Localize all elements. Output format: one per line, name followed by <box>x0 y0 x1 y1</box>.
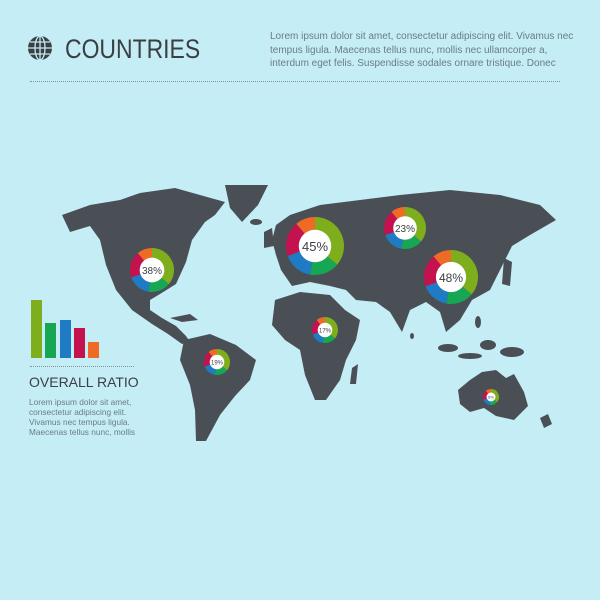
Iceland <box>250 219 262 225</box>
Philippines <box>475 316 481 328</box>
bar chart <box>31 300 99 358</box>
donut 48%: 48% <box>439 271 463 285</box>
donut 38%: 38% <box>142 266 162 277</box>
header text: Lorem ipsum dolor sit amet, consectetur adipiscing elit. Vivamus nec tempus ligula. Maecenas tellus nunc, mollis nec ullamcorper a, interdum eget felis. Suspendisse sodales ornare tristique. Donec <box>270 31 573 69</box>
Greenland <box>225 185 268 222</box>
donut 45%: 45% <box>302 239 328 254</box>
donut 6%: 6% <box>488 394 494 400</box>
New Zealand <box>540 414 552 428</box>
North America <box>62 188 225 344</box>
donut 17% <box>312 317 338 343</box>
Eurasia <box>272 190 556 332</box>
donut 23%: 23% <box>395 224 415 235</box>
donut 38% <box>130 248 174 292</box>
Australia <box>458 370 528 420</box>
donut 23% <box>384 207 426 249</box>
donut 19%: 19% <box>211 360 224 366</box>
South America <box>180 334 256 441</box>
Africa <box>272 292 360 400</box>
donut 45% <box>286 217 344 275</box>
title: COUNTRIES <box>65 34 200 64</box>
UK, Japan, Madagascar, Sri Lanka <box>264 228 274 248</box>
donut 17%: 17% <box>319 328 332 334</box>
icon: globe <box>28 36 52 60</box>
heading: overall ratio: OVERALL RATIO <box>29 374 139 390</box>
Indonesia <box>438 344 458 352</box>
ratio text: Lorem ipsum dolor sit amet, consectetur adipiscing elit. Vivamus nec tempus ligula. Maecenas tellus nunc, mollis <box>29 397 135 437</box>
donut 48% <box>424 250 478 304</box>
donut 19% <box>204 349 230 375</box>
donut 6% <box>483 389 499 405</box>
